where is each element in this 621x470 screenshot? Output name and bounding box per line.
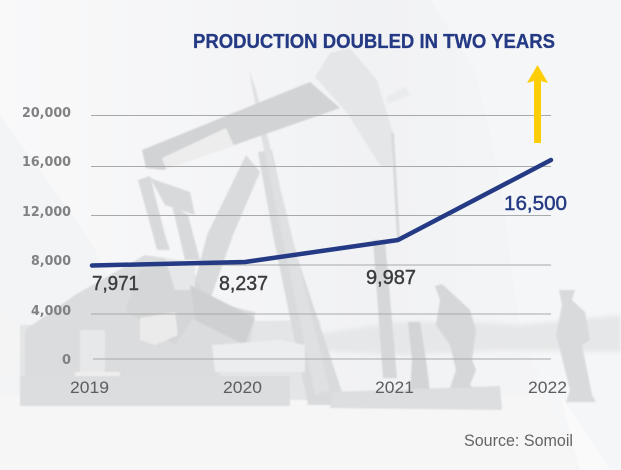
y axis labels — [22, 105, 71, 368]
pitman arm and counterweight — [138, 176, 200, 260]
gearbox and base — [25, 255, 255, 395]
title: PRODUCTION DOUBLED IN TWO YEARS — [193, 30, 555, 53]
y axis labels: 0 — [62, 352, 71, 368]
data labels: 8,237 — [219, 272, 268, 295]
x axis labels: 2021 — [375, 379, 414, 397]
x axis labels: 2019 — [70, 379, 109, 397]
x axis labels — [70, 379, 567, 397]
well pole — [373, 240, 397, 378]
x axis labels: 2022 — [528, 379, 567, 397]
data labels: 7,971 — [92, 272, 139, 295]
background photo: wellhead and workers — [330, 133, 596, 410]
production line — [92, 160, 551, 266]
polish rod — [391, 133, 400, 240]
wellhead — [408, 322, 430, 392]
pump jack horsehead — [315, 48, 393, 167]
y axis labels: 4,000 — [31, 303, 71, 319]
data labels — [92, 192, 567, 295]
pump jack beam — [142, 82, 340, 170]
storage tank — [0, 311, 20, 379]
pump jack legs — [190, 70, 345, 405]
concrete platform — [330, 386, 502, 410]
data labels: 9,987 — [366, 266, 416, 289]
y axis labels: 16,000 — [22, 154, 71, 170]
icon: upward arrow — [527, 65, 548, 143]
y axis labels: 20,000 — [22, 105, 71, 121]
x axis labels: 2020 — [223, 379, 262, 397]
treeline — [310, 315, 621, 355]
y axis labels: 8,000 — [31, 253, 71, 269]
background photo: pump jack — [0, 48, 410, 406]
source note: Source: Somoil — [464, 431, 573, 450]
data labels: 16,500 — [504, 192, 567, 215]
y axis labels: 12,000 — [22, 204, 71, 220]
fence and frame — [20, 320, 322, 400]
worker right — [556, 290, 596, 402]
worker left — [435, 284, 476, 388]
grid lines — [91, 116, 551, 359]
